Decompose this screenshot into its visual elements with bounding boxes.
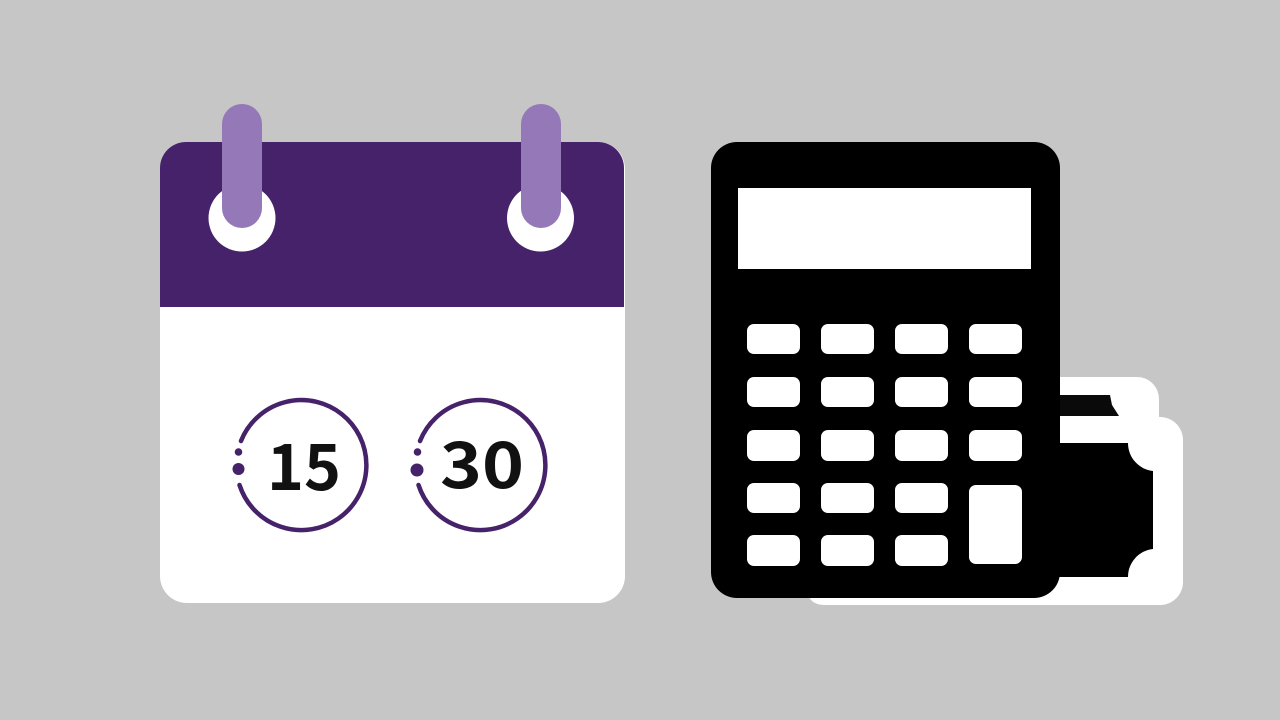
date badge: 15 (232, 400, 366, 530)
white banknote outline (809, 377, 1183, 605)
left binding ring (208, 104, 276, 252)
calculator keypad (747, 324, 1022, 566)
calculator display (738, 188, 1031, 269)
date badge: 30: 30 (440, 415, 524, 507)
right binding ring (507, 104, 574, 252)
rear banknote (1050, 395, 1119, 416)
front banknote (1050, 443, 1153, 577)
date badge: 30 (410, 400, 545, 530)
calendar header band (160, 142, 624, 307)
icon: calculator (711, 142, 1060, 598)
date badge: 15: 15 (267, 417, 341, 509)
calendar page (160, 142, 625, 603)
icon: calendar (160, 104, 625, 603)
icon: banknotes behind calculator (809, 377, 1183, 605)
calculator body (711, 142, 1060, 598)
